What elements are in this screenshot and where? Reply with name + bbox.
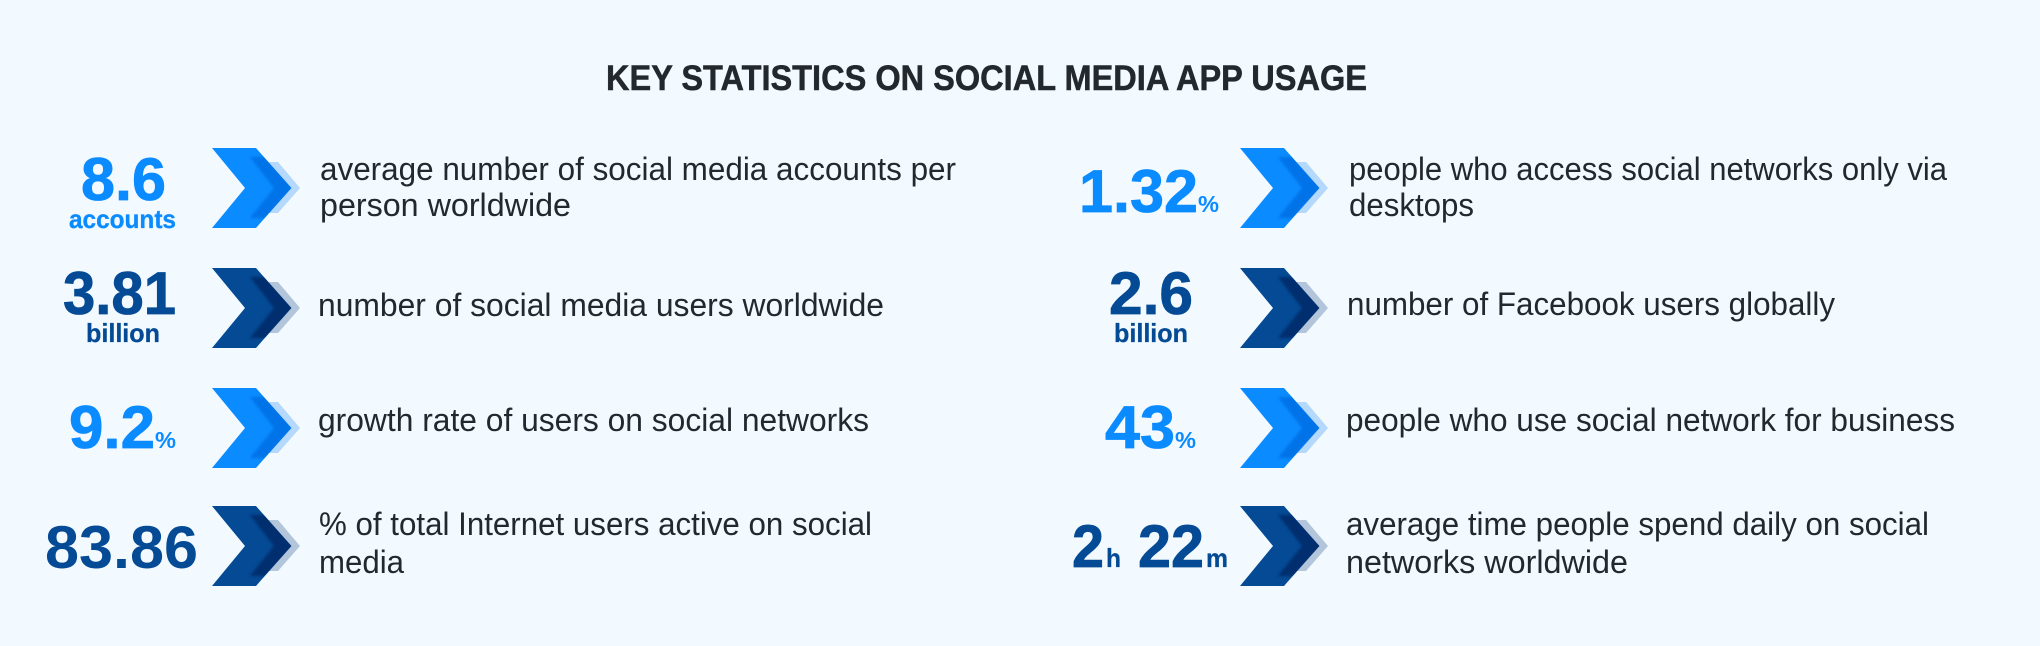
stat value: 3.81 billion: 3.81 [63,260,176,327]
stat row: social media users [63,260,884,348]
stat value: 8.6 accounts: 8.6 [81,146,166,213]
description text [1346,506,1929,580]
description text: media [319,544,404,580]
description text: desktops [1349,187,1474,223]
stat value: 3.81 billion: billion [86,318,160,348]
icon: dark blue chevron [1240,506,1328,586]
stat row: daily time [1072,506,1929,586]
title: KEY STATISTICS ON SOCIAL MEDIA APP USAGE [606,59,1367,98]
stat value: 8.6 accounts [69,146,176,234]
stat value: 8.6 accounts: accounts [69,204,176,234]
description text [319,506,872,580]
description text: networks worldwide [1346,544,1628,580]
description text [320,151,956,223]
description text: average time people spend daily on social [1346,506,1929,542]
stat value: 9.2%: % [155,427,176,453]
description text: people who use social network for business [1346,402,1955,438]
stat value: 1.32%: % [1198,191,1219,217]
description text: growth rate of users on social networks [318,402,869,438]
stat row: desktop only [1079,148,1947,228]
stat value: 2h 22m: 2 [1072,513,1104,580]
icon: bright blue chevron [212,388,300,468]
stat value: 1.32%: 1.32 [1079,158,1198,225]
stat value: 2h 22m: 22 [1138,513,1204,580]
stat value: 2h 22m: h [1106,543,1121,573]
description text: % of total Internet users active on social [319,506,872,542]
stat row: internet users active [45,506,872,586]
description text: people who access social networks only via [1349,151,1947,187]
stat value: 2.6 billion: 2.6 [1109,260,1193,327]
stat row: growth rate [69,388,869,468]
icon: dark blue chevron [212,506,300,586]
stat value: 9.2%: 9.2 [69,394,155,461]
stat value: 43%: 43 [1105,394,1175,461]
description text: average number of social media accounts per [320,151,956,187]
stat row: Facebook users [1109,260,1835,348]
stat row: business use [1105,388,1955,468]
icon: bright blue chevron [1240,148,1328,228]
description text: number of social media users worldwide [318,287,884,323]
stat value: 2h 22m: m [1206,543,1228,573]
icon: dark blue chevron [212,268,300,348]
stat value: 43%: % [1175,427,1196,453]
description text: person worldwide [320,187,571,223]
stat row: average accounts per person [69,146,956,234]
icon: bright blue chevron [212,148,300,228]
description text: number of Facebook users globally [1347,286,1835,322]
icon: dark blue chevron [1240,268,1328,348]
stat value: 2h 22m [1072,513,1228,580]
description text [1349,151,1947,223]
icon: bright blue chevron [1240,388,1328,468]
stat value: 83.86: 83.86 [45,514,198,581]
stat value: 2.6 billion: billion [1114,318,1188,348]
